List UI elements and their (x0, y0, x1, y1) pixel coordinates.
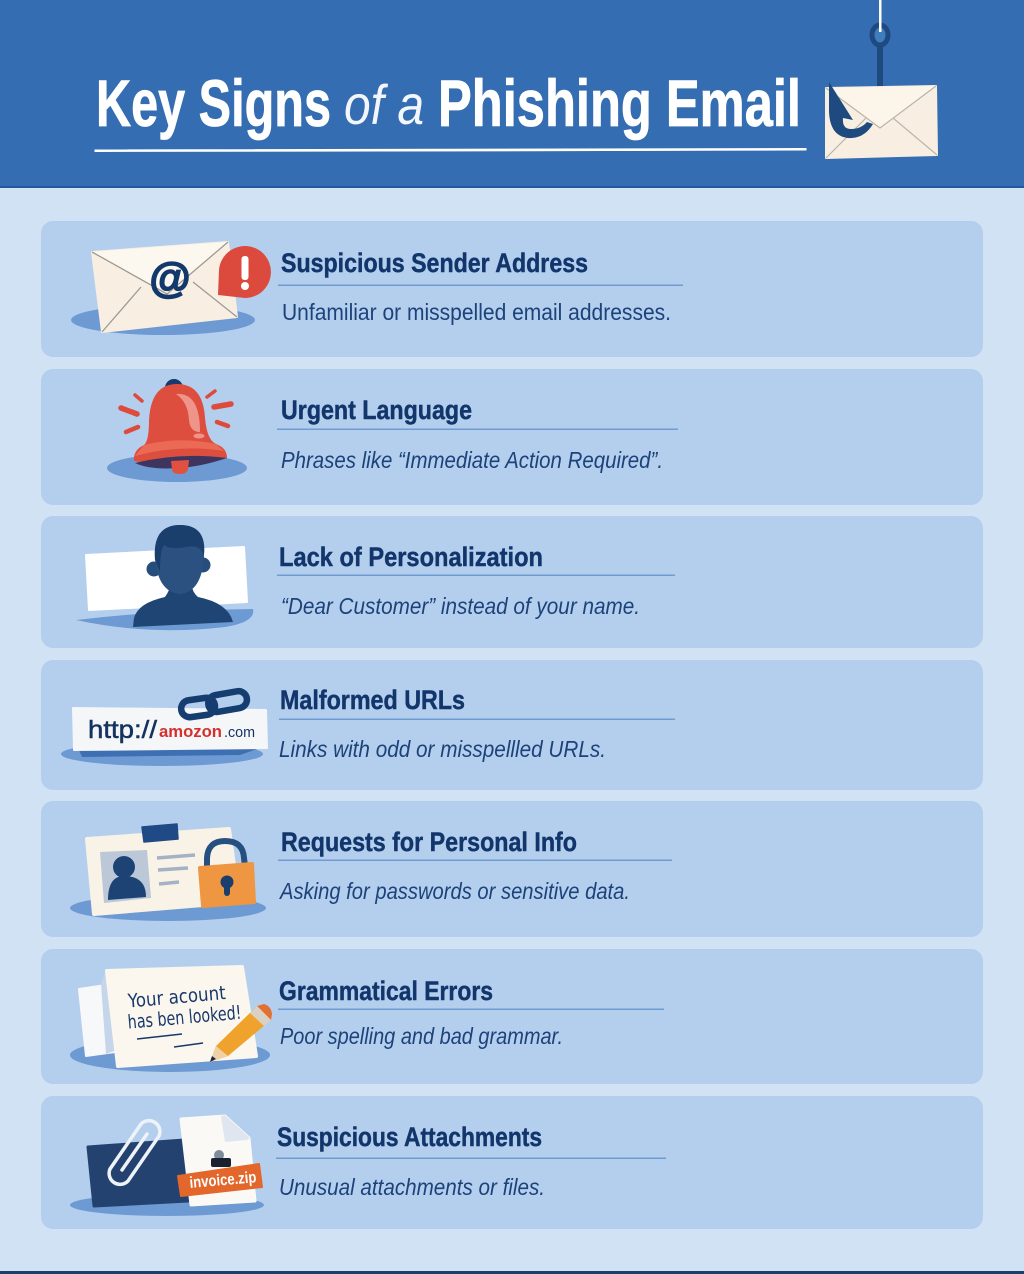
icon: address bar with chain link: amozon (159, 722, 222, 741)
icon: envelope with at sign and alert (71, 242, 271, 335)
icon: misspelled note with pencil: has ben looked! (127, 1002, 242, 1034)
icon: address bar with chain link: .com (224, 724, 255, 741)
title: Key Signs (96, 66, 331, 140)
icon: misspelled note with pencil: Your acount (126, 982, 227, 1013)
icon: id card and padlock (70, 824, 266, 921)
title (96, 66, 801, 140)
panel: lack of personalization (41, 516, 983, 648)
icon: address bar with chain link (61, 690, 267, 766)
panel: requests for personal info (41, 801, 983, 937)
heading: Malformed URLs (280, 685, 465, 715)
panel: urgent language (41, 369, 983, 505)
icon: envelope with at sign and alert: @ (150, 254, 190, 301)
icon: email on fishing hook (826, 0, 937, 158)
title: Phishing Email (438, 66, 801, 140)
description: “Dear Customer” instead of your name. (281, 593, 640, 619)
icon: alarm bell (107, 379, 247, 482)
heading: Lack of Personalization (279, 542, 543, 572)
panel: malformed urls (41, 660, 983, 790)
panel: suspicious attachments (41, 1096, 983, 1229)
description: Poor spelling and bad grammar. (280, 1023, 563, 1049)
heading: Suspicious Sender Address (281, 248, 588, 278)
description: Unusual attachments or files. (279, 1174, 545, 1200)
title: of a (344, 73, 424, 136)
heading: Requests for Personal Info (281, 827, 577, 857)
description: Links with odd or misspellled URLs. (279, 736, 606, 762)
icon: misspelled note with pencil (70, 967, 272, 1072)
title underline (95, 148, 806, 152)
icon: paperclip folder and zip file: invoice.zip (189, 1169, 257, 1192)
description: Phrases like “Immediate Action Required”. (281, 447, 663, 473)
heading: Grammatical Errors (279, 976, 493, 1006)
icon: paperclip folder and zip file (70, 1115, 264, 1216)
header band (0, 0, 1024, 188)
heading: Suspicious Attachments (277, 1122, 542, 1152)
description: Asking for passwords or sensitive data. (278, 878, 630, 904)
icon: address bar with chain link: http:// (88, 716, 157, 744)
panel: suspicious sender address (41, 221, 983, 357)
icon: anonymous person silhouette (76, 525, 253, 630)
panel: grammatical errors (41, 949, 983, 1084)
heading: Urgent Language (281, 395, 472, 425)
description: Unfamiliar or misspelled email addresses. (282, 299, 671, 325)
